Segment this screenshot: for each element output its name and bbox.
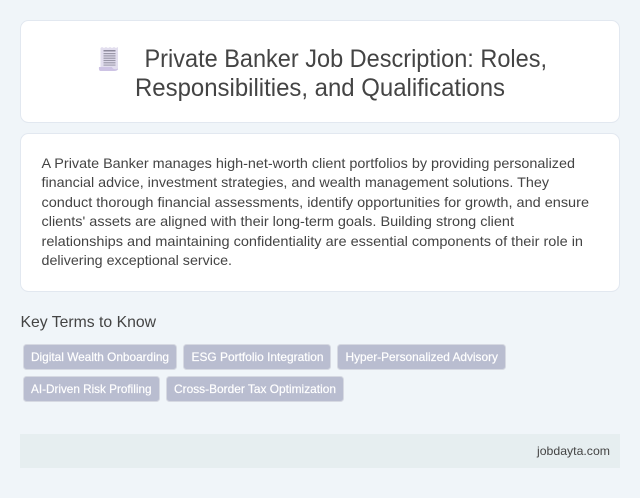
description text: conduct thorough financial assessments, identify opportunities for growth, and ensure bbox=[42, 194, 589, 210]
tag: Hyper-Personalized Advisory bbox=[338, 344, 506, 370]
tag: Hyper-Personalized Advisory: Hyper-Personalized Advisory bbox=[346, 350, 498, 364]
title: Responsibilities, and Qualifications bbox=[135, 74, 505, 102]
tag: AI-Driven Risk Profiling: AI-Driven Risk Profiling bbox=[31, 382, 152, 396]
footer bar bbox=[20, 434, 620, 468]
icon: paper receipt scroll bbox=[99, 47, 118, 71]
title: Private Banker Job Description: Roles, bbox=[144, 45, 547, 73]
panel: description card bbox=[20, 134, 620, 292]
tag group: key terms bbox=[24, 344, 506, 402]
tag: AI-Driven Risk Profiling bbox=[24, 376, 160, 402]
heading: key terms: Key Terms to Know bbox=[20, 314, 156, 331]
description text: financial advice, investment strategies, and wealth management solutions. They bbox=[42, 174, 549, 190]
description text: relationships and maintaining confidentiality are essential components of their role in bbox=[42, 233, 583, 249]
panel: title card bbox=[20, 20, 620, 122]
description text: A Private Banker manages high-net-worth client portfolios by providing personalized bbox=[42, 155, 575, 171]
description text: clients' assets are aligned with their long-term goals. Building strong client bbox=[42, 213, 514, 229]
tag: ESG Portfolio Integration bbox=[184, 344, 330, 370]
footer source text: jobdayta.com bbox=[536, 444, 610, 458]
tag: Cross-Border Tax Optimization: Cross-Border Tax Optimization bbox=[174, 382, 336, 396]
title bbox=[135, 45, 547, 102]
tag: ESG Portfolio Integration: ESG Portfolio Integration bbox=[192, 350, 324, 364]
tag: Cross-Border Tax Optimization bbox=[166, 376, 344, 402]
tag: Digital Wealth Onboarding bbox=[24, 344, 176, 370]
description text bbox=[42, 155, 589, 268]
description text: delivering exceptional service. bbox=[42, 252, 232, 268]
tag: Digital Wealth Onboarding: Digital Wealth Onboarding bbox=[31, 350, 169, 364]
